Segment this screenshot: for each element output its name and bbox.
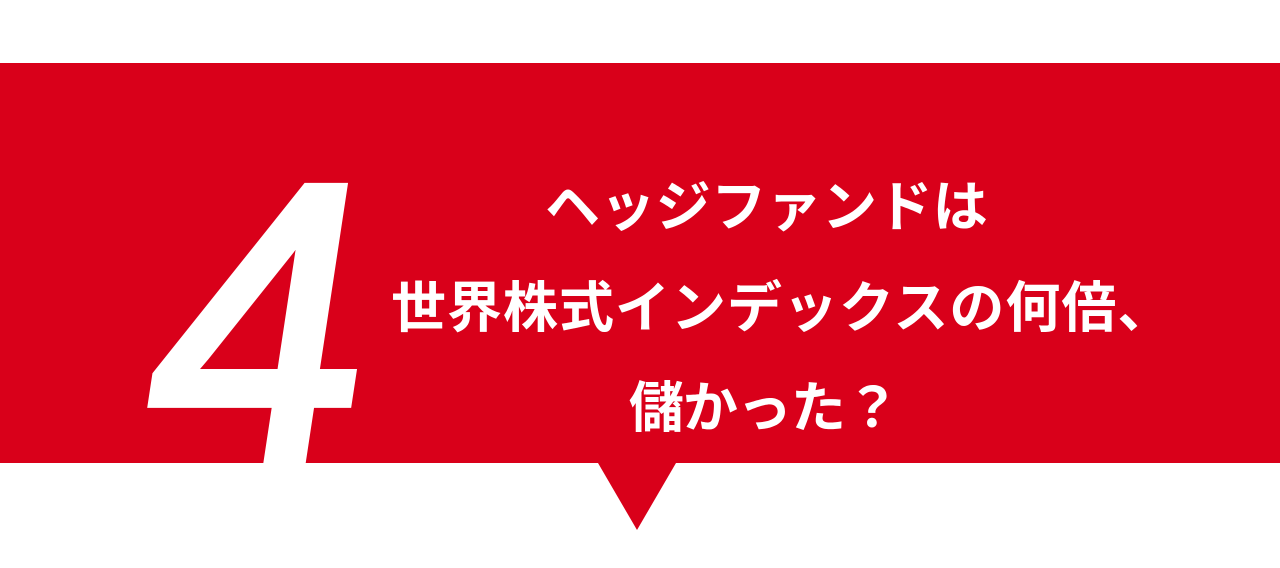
heading: [391, 176, 1173, 439]
heading: 世界株式インデックスの何倍、: [391, 277, 1173, 339]
panel: red banner: [0, 63, 1280, 463]
heading: 儲かった？: [629, 377, 899, 439]
arrow: downward pointer: [598, 463, 676, 530]
heading: ヘッジファンドは: [545, 176, 988, 238]
